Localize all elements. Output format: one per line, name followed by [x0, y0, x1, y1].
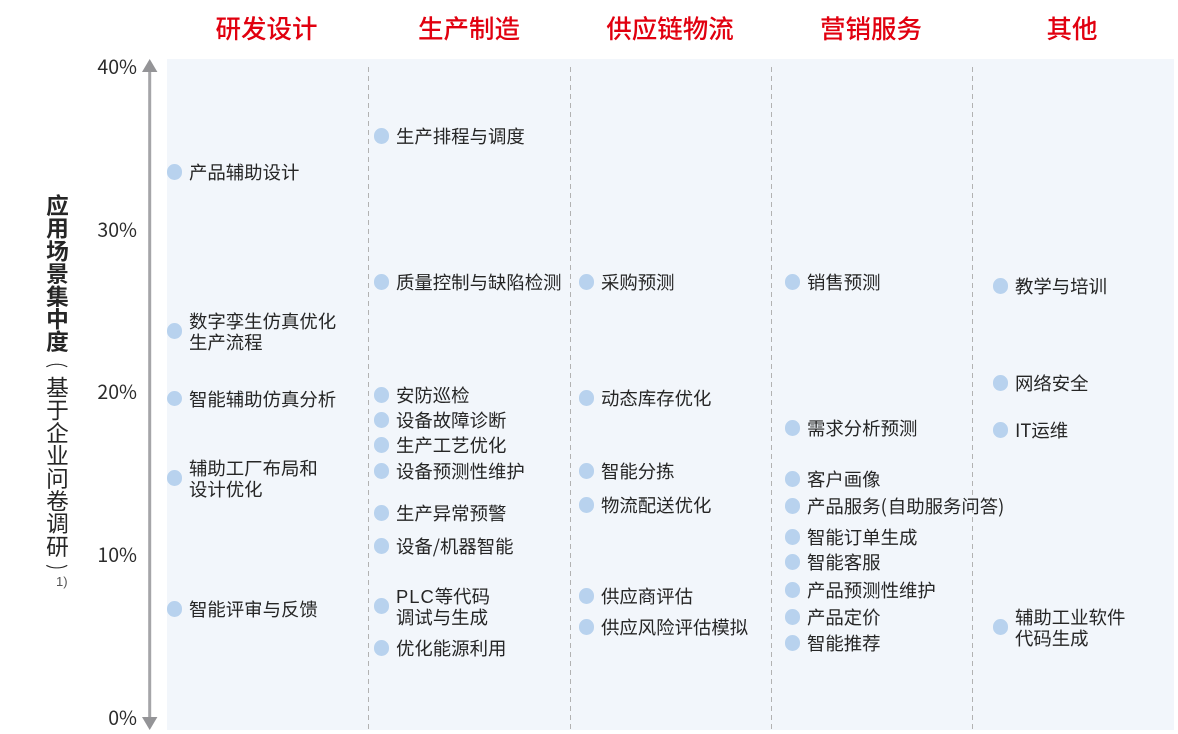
item: 供应风险评估模拟: 供应风险评估模拟 — [601, 614, 748, 640]
item: 智能推荐: 智能推荐 — [807, 630, 881, 656]
item: 数字孪生仿真优化生产流程: 数字孪生仿真优化 — [189, 308, 336, 334]
item: 智能辅助仿真分析: 智能辅助仿真分析 — [189, 386, 336, 412]
item: 客户画像: 客户画像 — [807, 466, 881, 492]
footnote marker: 1) — [56, 574, 68, 589]
item: 网络安全: 网络安全 — [1015, 370, 1089, 396]
axis label 0%: 0% — [108, 702, 137, 731]
item: 辅助工厂布局和设计优化 — [167, 454, 318, 502]
opening bracket: （ — [41, 354, 74, 368]
column 1 items — [167, 159, 336, 622]
item: 产品服务(自助服务问答): 产品服务(自助服务问答) — [807, 493, 1005, 519]
column 5 items — [993, 273, 1125, 651]
item: 销售预测: 销售预测 — [807, 269, 881, 295]
heading: 营销服务: 营销服务 — [820, 9, 922, 46]
axis label 30%: 30% — [97, 214, 137, 243]
plot background panel — [167, 59, 1174, 730]
item: 设备故障诊断: 设备故障诊断 — [396, 407, 506, 433]
item: 设备/机器智能: 设备/机器智能 — [396, 533, 514, 559]
item: 供应商评估: 供应商评估 — [601, 583, 693, 609]
item: 设备预测性维护: 设备预测性维护 — [396, 458, 525, 484]
item: 辅助工业软件代码生成: 辅助工业软件 — [1015, 604, 1125, 630]
y-axis arrow — [142, 59, 158, 730]
heading: 供应链物流: 供应链物流 — [606, 9, 734, 46]
item: 智能客服: 智能客服 — [807, 549, 881, 575]
item: 产品辅助设计: 产品辅助设计 — [189, 159, 299, 185]
item: 物流配送优化: 物流配送优化 — [601, 492, 711, 518]
item: 优化能源利用: 优化能源利用 — [396, 635, 506, 661]
column 3 items — [579, 269, 748, 640]
item: 辅助工业软件代码生成 — [994, 605, 1178, 649]
item: 智能订单生成: 智能订单生成 — [807, 524, 917, 550]
heading: 研发设计: 研发设计 — [215, 9, 318, 46]
item: 生产工艺优化: 生产工艺优化 — [396, 432, 506, 458]
closing bracket: ） — [41, 564, 74, 578]
item: 教学与培训: 教学与培训 — [1015, 273, 1107, 299]
item: 数字孪生仿真优化生产流程: 生产流程 — [189, 329, 263, 355]
item: 辅助工厂布局和设计优化: 设计优化 — [189, 476, 263, 502]
item: 生产排程与调度: 生产排程与调度 — [396, 123, 525, 149]
item: 产品预测性维护: 产品预测性维护 — [807, 577, 936, 603]
item: 需求分析预测: 需求分析预测 — [807, 415, 917, 441]
item: 产品定价: 产品定价 — [807, 604, 881, 630]
heading: 其他: 其他 — [1046, 9, 1098, 46]
item: 动态库存优化: 动态库存优化 — [601, 385, 711, 411]
y-axis title bold part: 应用场景集中度 — [41, 194, 74, 353]
item: IT运维: IT运维 — [1015, 417, 1068, 443]
y-axis title — [41, 194, 74, 578]
item: 安防巡检: 安防巡检 — [396, 382, 470, 408]
axis label 20%: 20% — [97, 376, 137, 405]
item: 辅助工业软件代码生成: 代码生成 — [1015, 625, 1089, 651]
column 4 items — [785, 269, 1005, 656]
item: 数字孪生仿真优化生产流程 — [167, 308, 336, 355]
item: 智能分拣: 智能分拣 — [601, 458, 675, 484]
item: 辅助工厂布局和设计优化: 辅助工厂布局和 — [189, 454, 318, 480]
item: 生产异常预警: 生产异常预警 — [396, 500, 506, 526]
item: 采购预测: 采购预测 — [601, 269, 675, 295]
heading: 生产制造: 生产制造 — [418, 9, 520, 46]
column 2 items — [374, 123, 562, 661]
item: PLC等代码调试与生成: 调试与生成 — [396, 604, 488, 630]
item: PLC等代码调试与生成 — [374, 582, 490, 630]
y-axis title regular part: 基于企业问卷调研 — [41, 376, 74, 558]
axis label 10%: 10% — [97, 539, 137, 568]
item: 智能评审与反馈: 智能评审与反馈 — [189, 596, 318, 622]
item: PLC等代码调试与生成: PLC等代码 — [396, 582, 490, 608]
axis label 40%: 40% — [97, 51, 137, 80]
item: 质量控制与缺陷检测: 质量控制与缺陷检测 — [396, 269, 562, 295]
